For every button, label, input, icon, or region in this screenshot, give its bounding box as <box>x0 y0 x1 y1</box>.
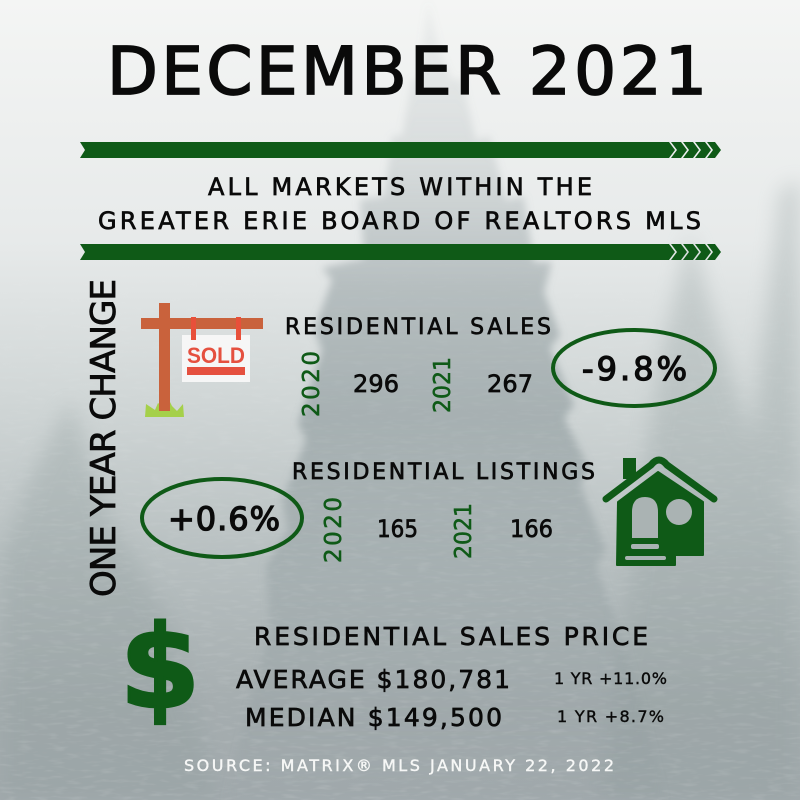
callout: listings change <box>142 479 302 557</box>
title: DECEMBER 2021 <box>107 33 707 110</box>
callout: sales change <box>553 330 715 406</box>
panel: residential sales: 267 <box>487 370 533 398</box>
panel: residential sales price <box>236 622 667 732</box>
panel: residential sales: RESIDENTIAL SALES <box>285 315 551 340</box>
panel: residential listings: RESIDENTIAL LISTINGS <box>292 460 595 485</box>
subtitle <box>98 173 701 235</box>
panel: residential sales: 296 <box>353 370 399 398</box>
panel: residential listings: 165 <box>377 515 418 543</box>
side heading: one year change: ONE YEAR CHANGE <box>84 279 124 597</box>
callout: sales change: -9.8% <box>582 350 687 388</box>
icon: sold sign: SOLD <box>187 343 245 368</box>
panel: residential sales <box>285 315 551 417</box>
callout: listings change: +0.6% <box>168 500 280 538</box>
panel: residential sales price: 1 YR +11.0% <box>554 669 667 688</box>
subtitle: ALL MARKETS WITHIN THE <box>208 173 592 201</box>
top green arrow bar <box>80 142 721 158</box>
panel: residential listings: 2021 <box>451 503 477 559</box>
panel: residential sales price: 1 YR +8.7% <box>557 707 664 726</box>
panel: residential sales price: MEDIAN $149,500 <box>245 703 502 732</box>
panel: residential sales price: RESIDENTIAL SALES PRICE <box>254 622 648 651</box>
panel: residential listings: 166 <box>510 515 553 543</box>
panel: residential listings: 2020 <box>321 497 347 563</box>
subtitle: GREATER ERIE BOARD OF REALTORS MLS <box>98 207 701 235</box>
panel: residential listings <box>292 460 595 563</box>
icon: dollar sign: $ <box>120 601 200 734</box>
panel: residential sales: 2021 <box>430 357 456 413</box>
icon: sold sign <box>141 303 263 417</box>
second green arrow bar <box>80 244 721 260</box>
source note: SOURCE: MATRIX® MLS JANUARY 22, 2022 <box>184 756 614 775</box>
panel: residential sales: 2020 <box>299 351 325 417</box>
panel: residential sales price: AVERAGE $180,781 <box>236 665 510 694</box>
icon: house <box>606 458 714 565</box>
